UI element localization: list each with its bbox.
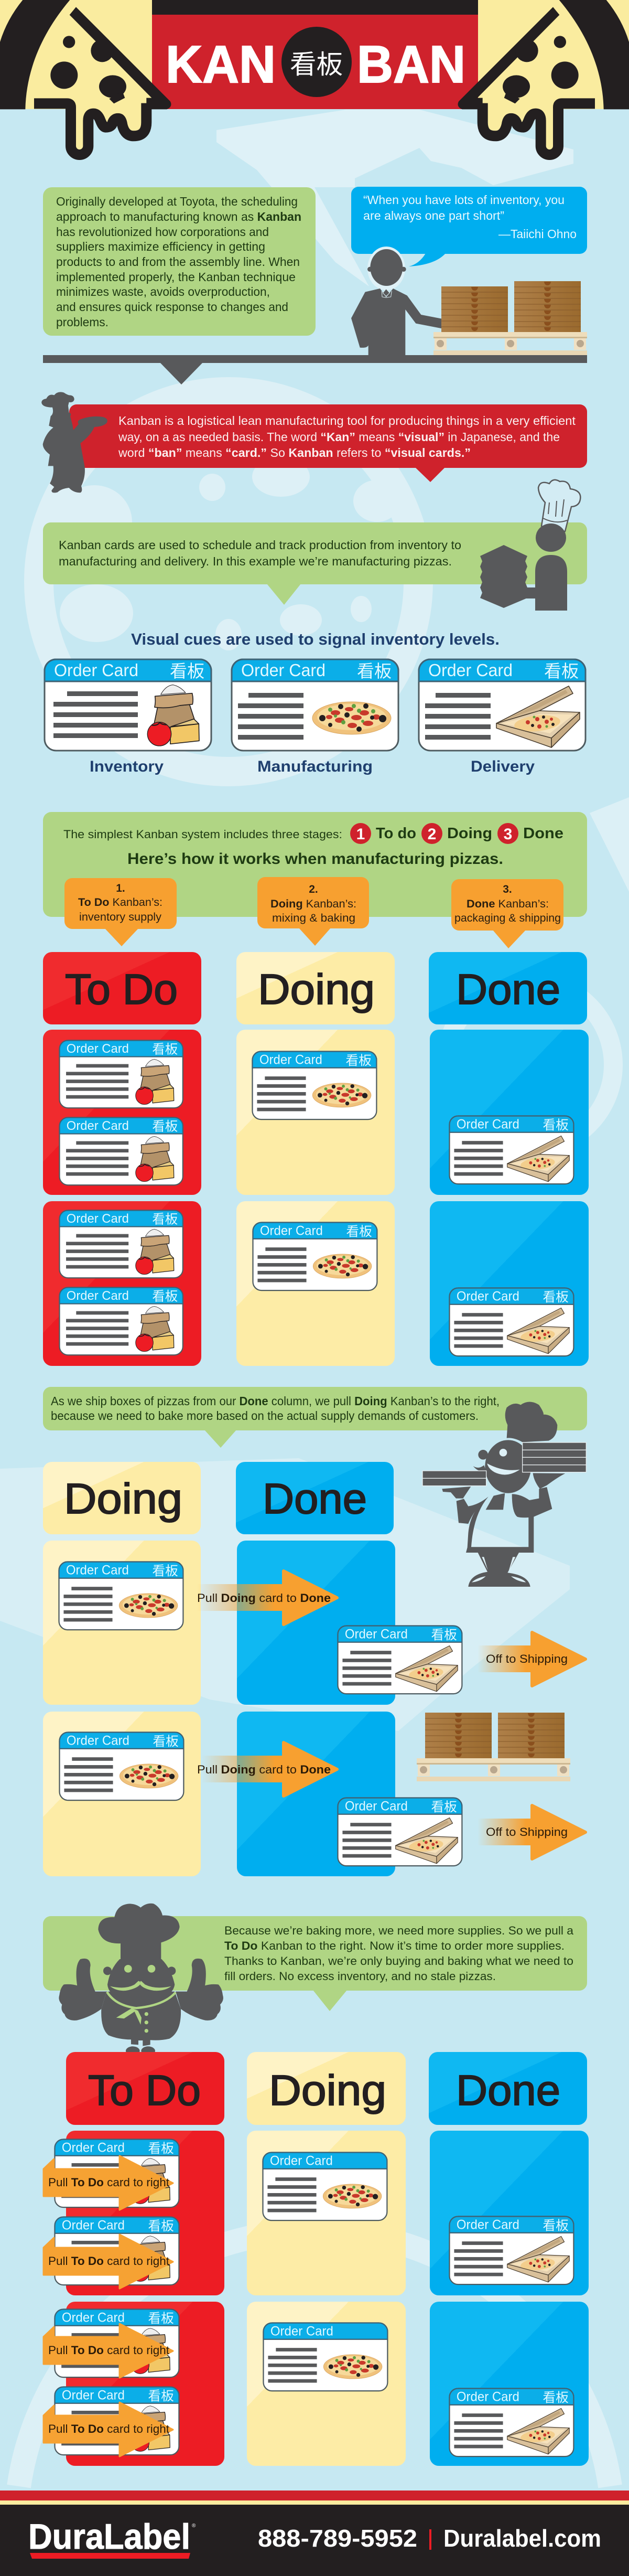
card: to do 1: Order Card bbox=[62, 2141, 125, 2155]
card: to do 3 bbox=[55, 2309, 179, 2377]
lane: doing row 1 bbox=[236, 1030, 395, 1195]
card: to do 4: 看板 bbox=[152, 1290, 178, 1304]
panel: intro text bbox=[43, 187, 316, 336]
panel: intro text: products to and from the assembly line. When bbox=[56, 255, 300, 269]
lane: to do row 2 bbox=[43, 1201, 201, 1366]
card: done 1: 看板 bbox=[431, 1628, 457, 1642]
card: to do 2: Order Card bbox=[67, 1119, 129, 1133]
card: to do 4: 看板 bbox=[148, 2389, 174, 2403]
card: doing 2 bbox=[263, 2323, 387, 2391]
title bbox=[166, 27, 465, 97]
card: done 2: Order Card bbox=[457, 2390, 519, 2404]
callout: baking more needs supplies bbox=[43, 1916, 587, 2011]
card: doing 1 bbox=[263, 2152, 387, 2220]
card: done 2: Order Card bbox=[345, 1799, 408, 1813]
card: manufacturing: Order Card bbox=[241, 660, 326, 680]
callout: shipping pulls doing bbox=[43, 1387, 587, 1448]
stage 2 badge bbox=[421, 823, 442, 844]
panel: intro text: implemented properly, the Kanban technique bbox=[56, 270, 296, 284]
arrow: pull doing to done 1 bbox=[197, 1571, 337, 1624]
title: KAN bbox=[166, 35, 276, 94]
panel: intro text: approach to manufacturing known as Kanban bbox=[56, 210, 301, 223]
lane: to do row 1 bbox=[43, 1030, 201, 1195]
red title band bbox=[152, 15, 478, 109]
card: to do 4 bbox=[55, 2387, 179, 2455]
card: to do 2: 看板 bbox=[152, 1120, 178, 1134]
callout: baking more needs supplies: Because we’re baking more, we need more supplies. So we pull a bbox=[224, 1924, 574, 1937]
callout: step 2 doing: Doing Kanban’s: bbox=[270, 898, 356, 910]
callout: shipping pulls doing: because we need to bake more based on the actual supply demands of customers. bbox=[51, 1409, 479, 1423]
card: done 2 bbox=[449, 1288, 573, 1356]
background watermark: pizza ring bbox=[39, 386, 418, 772]
callout: kanban cards usage bbox=[43, 522, 587, 605]
column header: done bbox=[429, 952, 587, 1024]
card: done 2: 看板 bbox=[543, 1290, 569, 1305]
card: to do 2: Order Card bbox=[62, 2218, 125, 2232]
column header: doing: Doing bbox=[64, 1475, 182, 1523]
panel: intro text: suppliers maximize efficiency in getting bbox=[56, 240, 265, 253]
callout: step 1 to do: To Do Kanban’s: bbox=[78, 896, 162, 908]
label: manufacturing: Manufacturing bbox=[257, 758, 373, 775]
card: doing 2: Order Card bbox=[67, 1734, 129, 1748]
lane: done row 2 bbox=[430, 2302, 589, 2466]
arrow: off to shipping 1: Off to Shipping bbox=[486, 1652, 568, 1665]
callout: kanban cards usage: Kanban cards are used to schedule and track production from inventory to bbox=[59, 538, 461, 552]
callout: Taiichi Ohno quote: “When you have lots of inventory, you bbox=[363, 193, 565, 207]
callout: step 3 done bbox=[451, 879, 563, 948]
background watermark: section two shapes bbox=[0, 797, 629, 2486]
kanban board one bbox=[43, 952, 589, 1366]
panel: three stages: The simplest Kanban system includes three stages: bbox=[63, 828, 342, 841]
card: delivery: Order Card bbox=[428, 660, 513, 680]
card: doing 1: 看板 bbox=[153, 1564, 178, 1578]
card: to do 3: Order Card bbox=[62, 2311, 125, 2325]
card: doing 1: Order Card bbox=[259, 1053, 322, 1067]
icon: waiter chef carrying boxes bbox=[422, 1402, 586, 1587]
icon: pizza slice left bbox=[0, 0, 171, 155]
column header: done: Done bbox=[456, 2067, 560, 2114]
card: to do 3: Order Card bbox=[67, 1212, 129, 1226]
callout: kanban cards usage: manufacturing and delivery. In this example we’re manufacturing pizzas. bbox=[59, 554, 452, 568]
website: Duralabel.com bbox=[443, 2525, 601, 2552]
kanban board two bbox=[43, 1462, 585, 1876]
callout: Taiichi Ohno quote bbox=[351, 187, 587, 266]
column header: to do bbox=[43, 952, 201, 1024]
card: to do 4: Order Card bbox=[67, 1289, 129, 1303]
lane: doing row 2 bbox=[247, 2302, 406, 2466]
card: to do 4 bbox=[59, 1287, 183, 1355]
stage 3 name: Done bbox=[523, 825, 563, 842]
column header: doing: Doing bbox=[258, 966, 375, 1013]
card: inventory: Order Card bbox=[54, 660, 138, 680]
column header: to do bbox=[66, 2052, 224, 2125]
card: doing 2: 看板 bbox=[153, 1734, 179, 1749]
card: to do 3 bbox=[59, 1210, 183, 1278]
title: 看板 bbox=[290, 50, 343, 79]
panel: three stages bbox=[43, 812, 587, 917]
card: doing 2 bbox=[253, 1222, 377, 1290]
card: done 1: Order Card bbox=[457, 1117, 519, 1131]
column header: doing bbox=[236, 952, 395, 1024]
panel: intro text: Originally developed at Toyota, the scheduling bbox=[56, 195, 298, 208]
callout: baking more needs supplies: fill orders. No excess inventory, and no stale pizzas. bbox=[224, 1970, 496, 1983]
stage 1 badge: 1 bbox=[356, 826, 365, 843]
card: doing 2 bbox=[59, 1732, 183, 1800]
card: doing 1: Order Card bbox=[270, 2154, 333, 2168]
logo: DuraLabel: DuraLabel bbox=[28, 2517, 190, 2557]
card: manufacturing bbox=[232, 659, 398, 751]
column header: done: Done bbox=[263, 1475, 367, 1523]
stage 2 badge: 2 bbox=[428, 826, 436, 843]
callout: what is kanban: word “ban” means “card.” So Kanban refers to “visual cards.” bbox=[118, 446, 471, 459]
stage 3 badge bbox=[497, 823, 518, 844]
header banner bbox=[0, 0, 629, 155]
card: done 1 bbox=[449, 1116, 573, 1184]
card: inventory: 看板 bbox=[170, 661, 204, 681]
arrow: pull doing to done 2: Pull Doing card to Done bbox=[197, 1763, 331, 1776]
card: done 2: Order Card bbox=[457, 1289, 519, 1303]
arrow: off to shipping 1 bbox=[478, 1632, 585, 1686]
callout: step 3 done: packaging & shipping bbox=[454, 912, 561, 924]
callout: step 2 doing bbox=[257, 877, 369, 946]
icon: chef silhouette with pizza bbox=[41, 392, 107, 493]
heading: visual cues: Visual cues are used to signal inventory levels. bbox=[131, 630, 500, 648]
card: done 1 bbox=[338, 1626, 462, 1694]
arrow: pull to do 1 bbox=[44, 2156, 173, 2210]
background watermark: chef hat shape bbox=[216, 110, 573, 286]
column header: to do: To Do bbox=[88, 2067, 201, 2114]
stage 3 badge: 3 bbox=[504, 826, 512, 843]
callout: baking more needs supplies: To Do Kanban to the right. Now it’s time to order more supplies. bbox=[224, 1939, 565, 1952]
lane: done row 1 bbox=[430, 2131, 589, 2295]
subheading: Here’s how it works when manufacturing pizzas. bbox=[127, 850, 503, 868]
lane: doing row 2 bbox=[43, 1712, 201, 1876]
arrow: pull to do 3: Pull To Do card to right bbox=[48, 2344, 169, 2357]
card: doing 1 bbox=[252, 1051, 376, 1119]
lane: done row 1 bbox=[237, 1541, 395, 1705]
shelf with pointer bbox=[43, 355, 587, 384]
card: to do 4: Order Card bbox=[62, 2388, 125, 2402]
callout: step 2 doing: mixing & baking bbox=[272, 912, 355, 924]
callout: what is kanban bbox=[69, 404, 587, 482]
column header: done bbox=[429, 2052, 587, 2125]
panel: intro text: has revolutionized how corporations and bbox=[56, 225, 269, 239]
card: done 2: 看板 bbox=[431, 1800, 457, 1814]
card: to do 1 bbox=[59, 1040, 183, 1108]
stage 1 badge bbox=[350, 823, 371, 844]
card: done 2 bbox=[449, 2388, 573, 2456]
callout: what is kanban: way, on a as needed basis. The word “Kan” means “visual” in Japanese, and the bbox=[118, 430, 560, 444]
label: delivery: Delivery bbox=[471, 758, 535, 775]
logo: DuraLabel: ® bbox=[192, 2523, 196, 2529]
lane: done row 2 bbox=[237, 1712, 395, 1876]
panel: intro text: problems. bbox=[56, 315, 109, 329]
arrow: pull to do 2: Pull To Do card to right bbox=[48, 2254, 169, 2268]
card: delivery bbox=[419, 659, 585, 751]
black top strip bbox=[152, 0, 478, 15]
arrow: pull doing to done 2 bbox=[197, 1743, 337, 1796]
card: to do 1: 看板 bbox=[152, 1043, 178, 1057]
callout: Taiichi Ohno quote: are always one part short” bbox=[363, 209, 504, 222]
phone number: 888-789-5952 bbox=[258, 2525, 417, 2552]
card: delivery: 看板 bbox=[544, 661, 579, 681]
arrow: pull to do 2 bbox=[44, 2235, 173, 2289]
lane: doing row 1 bbox=[43, 1541, 201, 1705]
lane: done row 2 bbox=[430, 1201, 589, 1366]
card: to do 1 bbox=[55, 2139, 179, 2207]
cream header band bbox=[0, 0, 629, 109]
arrow: pull to do 3 bbox=[44, 2324, 173, 2378]
column header: doing bbox=[43, 1462, 201, 1534]
arrow: off to shipping 2 bbox=[478, 1805, 585, 1859]
column header: doing: Doing bbox=[269, 2067, 386, 2114]
callout: what is kanban: Kanban is a logistical lean manufacturing tool for producing things in a very efficient bbox=[118, 414, 576, 427]
column header: done bbox=[236, 1462, 394, 1534]
icon: businessman bbox=[351, 247, 446, 356]
card: to do 3: 看板 bbox=[148, 2311, 174, 2326]
arrow: off to shipping 2: Off to Shipping bbox=[486, 1825, 568, 1839]
card: to do 3: 看板 bbox=[152, 1213, 178, 1227]
card: manufacturing: 看板 bbox=[357, 661, 392, 681]
card: to do 1: 看板 bbox=[148, 2141, 174, 2156]
card: doing 2: Order Card bbox=[260, 1224, 323, 1238]
card: doing 2: Order Card bbox=[270, 2324, 333, 2338]
lane: to do row 2 bbox=[66, 2302, 224, 2466]
title: BAN bbox=[357, 35, 465, 94]
kanban board three bbox=[44, 2052, 589, 2466]
card: doing 1: Order Card bbox=[66, 1563, 129, 1577]
column header: to do: To Do bbox=[65, 966, 178, 1013]
card: done 1: Order Card bbox=[345, 1627, 408, 1641]
card: done 1: 看板 bbox=[543, 1118, 569, 1132]
card: done 2: 看板 bbox=[543, 2390, 569, 2405]
callout: step 1 to do: 1. bbox=[116, 882, 125, 894]
callout: step 1 to do bbox=[64, 878, 177, 946]
callout: step 1 to do: inventory supply bbox=[79, 911, 162, 923]
card: inventory bbox=[45, 659, 211, 751]
card: done 1 bbox=[449, 2216, 573, 2284]
lane: doing row 2 bbox=[236, 1201, 395, 1366]
panel: intro text: and ensures quick response to changes and bbox=[56, 300, 288, 314]
stage 2 name: Doing bbox=[447, 825, 492, 842]
card: done 1: 看板 bbox=[543, 2218, 569, 2233]
callout: step 3 done: Done Kanban’s: bbox=[467, 898, 549, 910]
label: inventory: Inventory bbox=[90, 758, 164, 775]
icon: chef thumbs up bbox=[59, 1904, 223, 2056]
card: to do 2 bbox=[55, 2217, 179, 2285]
arrow: pull to do 4: Pull To Do card to right bbox=[48, 2422, 169, 2435]
card: doing 1: 看板 bbox=[346, 1053, 372, 1068]
callout: step 2 doing: 2. bbox=[309, 883, 318, 895]
card: doing 1 bbox=[59, 1562, 183, 1630]
panel: intro text: minimizes waste, avoids overproduction, bbox=[56, 285, 270, 298]
callout: baking more needs supplies: Thanks to Kanban, we’re only buying and baking what we need to bbox=[224, 1954, 573, 1968]
arrow: pull to do 4 bbox=[44, 2402, 173, 2456]
lane: done row 1 bbox=[430, 1030, 589, 1195]
column header: done: Done bbox=[456, 966, 560, 1013]
card: done 1: Order Card bbox=[457, 2218, 519, 2232]
icon: pizza slice right bbox=[458, 0, 629, 155]
stage 1 name: To do bbox=[376, 825, 416, 842]
lane: to do row 1 bbox=[66, 2131, 224, 2295]
callout: step 3 done: 3. bbox=[503, 883, 512, 895]
card: to do 2 bbox=[59, 1117, 183, 1185]
card: to do 1: Order Card bbox=[67, 1042, 129, 1056]
arrow: pull to do 1: Pull To Do card to right bbox=[48, 2176, 169, 2189]
card: done 2 bbox=[338, 1798, 462, 1866]
lane: doing row 1 bbox=[247, 2131, 406, 2295]
arrow: pull doing to done 1: Pull Doing card to Done bbox=[197, 1591, 331, 1605]
icon: pizza boxes on pallet bbox=[417, 1713, 570, 1781]
column header: doing bbox=[247, 2052, 406, 2125]
separator bbox=[429, 2529, 431, 2550]
callout: Taiichi Ohno quote: —Taiichi Ohno bbox=[498, 227, 577, 241]
icon: stacked pizza boxes on pallet bbox=[433, 281, 587, 355]
callout: shipping pulls doing: As we ship boxes of pizzas from our Done column, we pull Doing Kanban’s to the right, bbox=[51, 1394, 500, 1408]
icon: chef with white hat and box stack bbox=[480, 480, 580, 611]
card: to do 2: 看板 bbox=[148, 2219, 174, 2233]
card: doing 2: 看板 bbox=[346, 1224, 372, 1239]
footer bbox=[0, 2491, 629, 2576]
